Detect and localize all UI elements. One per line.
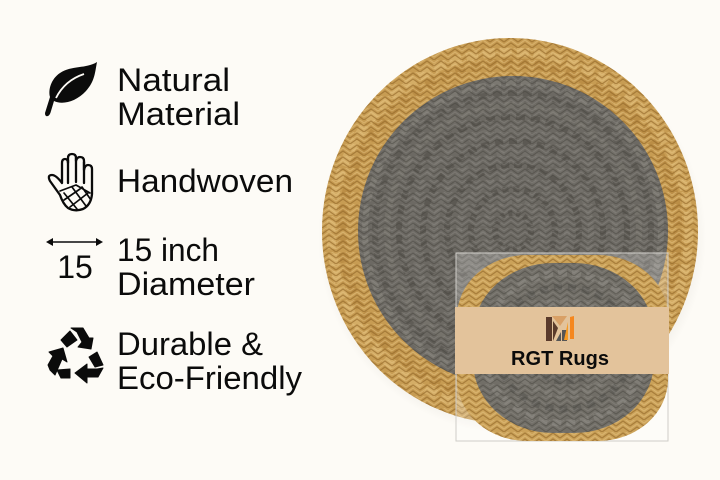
brand name: RGT Rugs bbox=[511, 348, 609, 370]
feature: handwoven bbox=[49, 154, 293, 210]
label: Natural bbox=[117, 62, 230, 98]
icon: width arrow and 15: 15 bbox=[57, 249, 93, 285]
label: Durable & bbox=[117, 326, 263, 362]
icon: hand bbox=[49, 154, 92, 210]
feature: natural material bbox=[45, 62, 240, 132]
gray braided center bbox=[358, 76, 668, 386]
icon: leaf bbox=[45, 62, 97, 116]
small gray rug center bbox=[473, 263, 654, 433]
clear plastic bag bbox=[456, 253, 668, 441]
icon: recycle bbox=[48, 328, 103, 383]
logo bbox=[546, 316, 574, 341]
label second line: Diameter bbox=[117, 266, 255, 302]
feature: durable bbox=[48, 326, 302, 396]
icon: width arrow and 15 bbox=[46, 238, 103, 285]
feature: diameter bbox=[46, 232, 255, 302]
gold braided border bbox=[322, 38, 698, 424]
label second line: Material bbox=[117, 96, 240, 132]
kraft paper band bbox=[455, 307, 669, 374]
label: 15 inch bbox=[117, 232, 219, 268]
label: Handwoven bbox=[117, 163, 293, 199]
small gold rug bbox=[457, 255, 668, 441]
large round rug bbox=[318, 38, 706, 434]
label second line: Eco-Friendly bbox=[117, 360, 302, 396]
packaged small rug bbox=[455, 253, 669, 441]
